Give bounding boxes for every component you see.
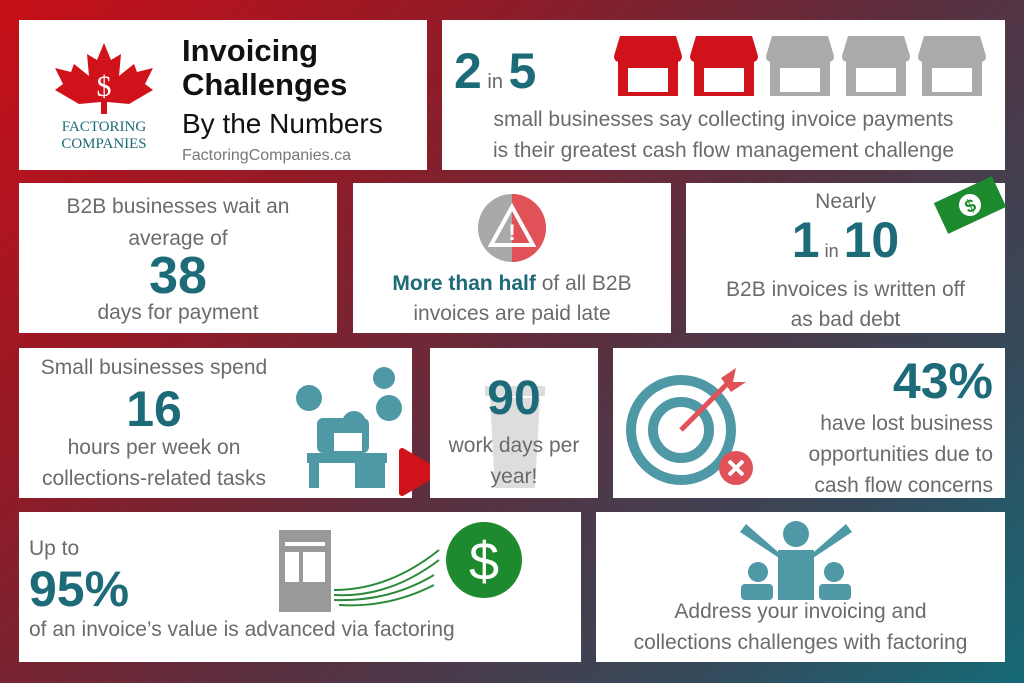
panel: 38 days: B2B businesses wait an — [67, 195, 289, 218]
icon: invoice to dollar — [279, 522, 522, 612]
heading: Challenges — [182, 67, 347, 102]
icon: trash — [485, 386, 545, 488]
icon: warning: ! — [508, 220, 516, 245]
arrow — [399, 448, 430, 496]
subheading: By the Numbers — [182, 108, 383, 139]
panel: 16 hours: Small businesses spend — [41, 356, 267, 379]
icon: warning — [478, 194, 546, 262]
panel: 95%: of an invoice’s value is advanced via factoring — [29, 618, 455, 641]
icon: flying money: $ — [962, 195, 979, 217]
panel: more than half: More than half of all B2B — [392, 272, 632, 295]
panel: address — [596, 512, 1005, 662]
panel: 16 hours: collections-related tasks — [42, 467, 266, 490]
panel: 16 hours: hours per week on — [68, 436, 240, 459]
panel: address: Address your invoicing and — [674, 600, 927, 623]
panel: 95% — [19, 512, 581, 662]
panel: address: collections challenges with factoring — [634, 631, 967, 654]
panel: 95%: Up to — [29, 537, 79, 560]
stat: 2 in 5 — [454, 43, 536, 99]
text: is their greatest cash flow management challenge — [493, 139, 954, 162]
url: FactoringCompanies.ca — [182, 147, 351, 164]
text: small businesses say collecting invoice payments — [494, 108, 953, 131]
panel: 43% — [613, 348, 1005, 498]
panel: 38 days — [19, 183, 337, 333]
heading — [182, 33, 347, 102]
logo: FACTORING — [62, 119, 146, 135]
logo: $ — [96, 70, 112, 103]
number: 38 — [149, 247, 207, 305]
panel: 38 days: days for payment — [97, 301, 259, 324]
panel: 1 in 10: B2B invoices is written off — [726, 278, 965, 301]
text — [493, 108, 954, 162]
panel: 90 days: work days per — [449, 434, 579, 457]
logo: COMPANIES — [61, 136, 147, 152]
panel: 43%: opportunities due to — [809, 443, 993, 466]
icon: flying money — [934, 176, 1006, 234]
number: 16 — [126, 381, 182, 437]
panel: 2 in 5 — [442, 20, 1005, 170]
icon: stressed worker — [296, 367, 402, 488]
panel: 43%: cash flow concerns — [814, 474, 993, 497]
number: 95% — [29, 561, 129, 617]
panel: 38 days: average of — [128, 227, 228, 250]
panel: 1 in 10: Nearly — [815, 190, 876, 213]
panel: 16 hours — [19, 348, 412, 498]
number: 1 in 10 — [792, 212, 899, 268]
panel: 1 in 10: as bad debt — [791, 308, 900, 331]
panel: 43%: have lost business — [820, 412, 993, 435]
panel: 43%: 43% — [893, 353, 993, 409]
panel: 90 days — [430, 348, 598, 498]
panel: more than half — [353, 183, 671, 333]
icon: people celebrating — [740, 521, 852, 600]
icon: target — [626, 368, 753, 485]
panel: 90 days: 90 — [487, 372, 541, 425]
panel: more than half: invoices are paid late — [413, 302, 611, 325]
icon: invoice to dollar: $ — [469, 532, 499, 592]
icon: stores — [614, 36, 986, 96]
panel: 1 in 10 — [686, 183, 1005, 333]
logo — [55, 43, 153, 152]
heading: Invoicing — [182, 33, 318, 68]
panel: 90 days: year! — [491, 465, 537, 488]
panel: title — [19, 20, 427, 170]
